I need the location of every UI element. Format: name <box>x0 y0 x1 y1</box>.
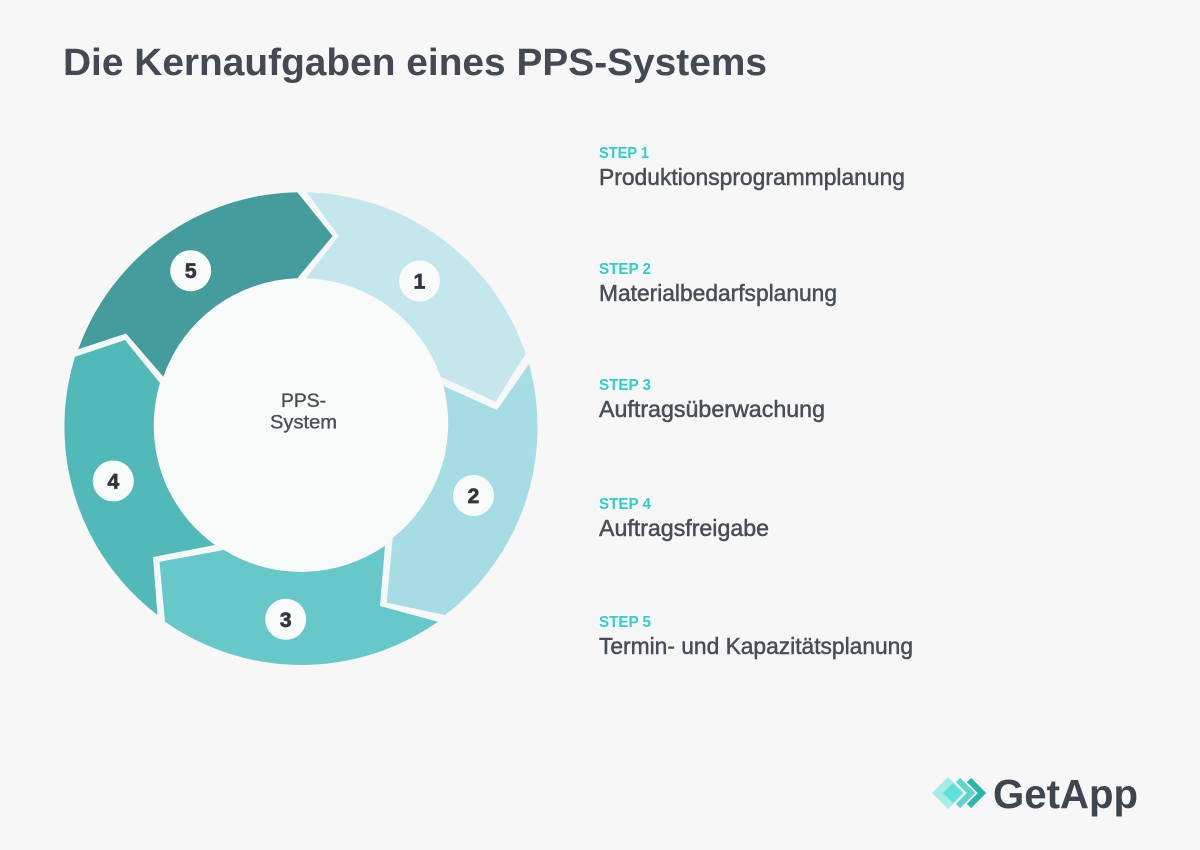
logo wordmark: GetApp <box>993 771 1138 817</box>
badge 4: 4 <box>107 470 119 494</box>
step 4: STEP 4 <box>599 496 651 513</box>
step 3: Auftragsüberwachung <box>599 396 825 422</box>
step 2: STEP 2 <box>599 261 651 278</box>
step 3 <box>599 377 825 422</box>
center label: System <box>270 412 337 434</box>
step 1: Produktionsprogrammplanung <box>599 164 905 190</box>
badge 1: 1 <box>414 270 426 294</box>
step 5: Termin- und Kapazitätsplanung <box>599 633 913 659</box>
badge 2 <box>453 475 494 516</box>
center circle <box>154 278 448 572</box>
center label: PPS- <box>281 391 326 412</box>
step 2 <box>599 261 837 306</box>
center label <box>270 391 337 434</box>
step 5 <box>599 614 913 659</box>
badge 4 <box>93 460 134 502</box>
badge 5 <box>170 250 211 291</box>
step 2: Materialbedarfsplanung <box>599 280 837 306</box>
badge 3 <box>265 599 306 640</box>
cycle diagram <box>64 192 538 665</box>
step 1 <box>599 145 905 190</box>
segment 1 <box>306 192 526 402</box>
segment 5 <box>78 192 333 377</box>
badge 2: 2 <box>468 485 479 508</box>
title: Die Kernaufgaben eines PPS-Systems <box>63 42 767 84</box>
step 3: STEP 3 <box>599 377 651 394</box>
segment 4 <box>64 340 215 615</box>
badge 5: 5 <box>185 260 197 283</box>
badge 1 <box>399 260 440 302</box>
segment 3 <box>160 546 438 665</box>
badge 3: 3 <box>280 609 292 632</box>
GetApp logo <box>932 771 1138 817</box>
step 5: STEP 5 <box>599 614 651 631</box>
step 4 <box>599 496 769 541</box>
icon: logo diamonds <box>932 777 982 809</box>
step 1: STEP 1 <box>599 145 649 162</box>
step 4: Auftragsfreigabe <box>599 515 769 541</box>
segment 2 <box>387 364 538 615</box>
